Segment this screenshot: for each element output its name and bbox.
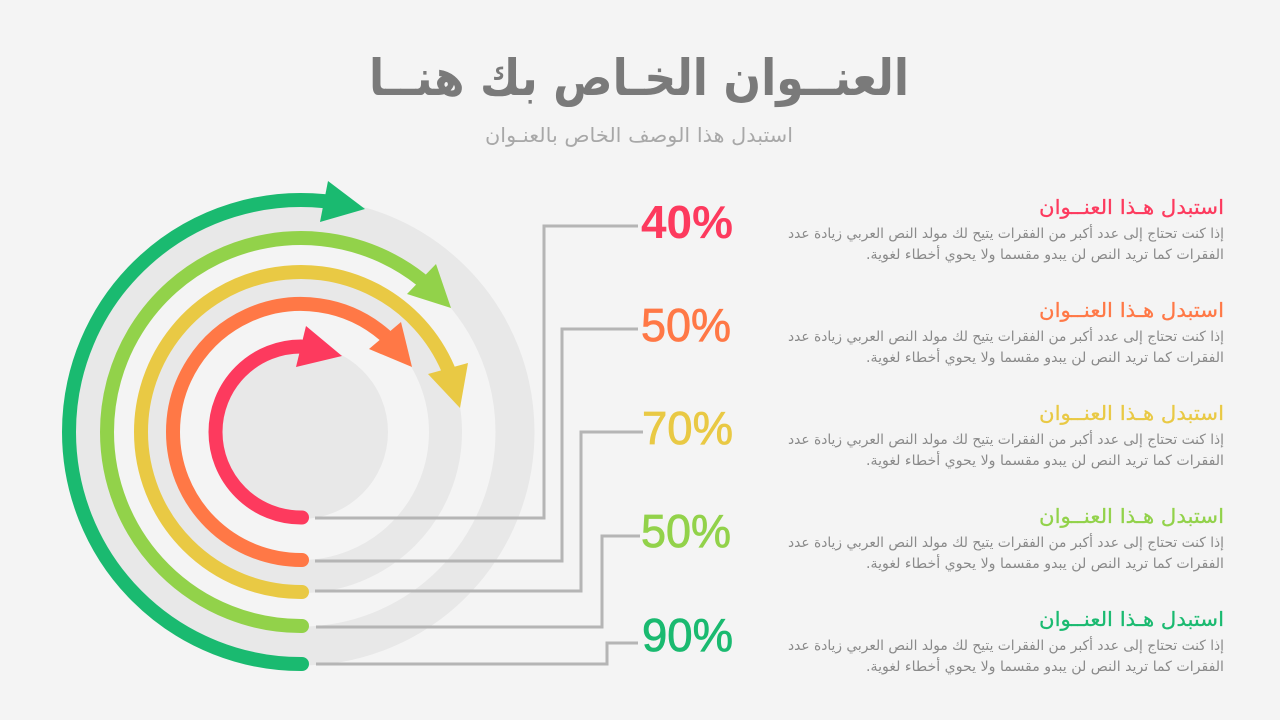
text block 1: استبدل هـذا العنــوان xyxy=(1039,195,1224,219)
text block 5 xyxy=(788,607,1224,675)
arrow: lime 50% xyxy=(107,238,451,626)
arrow: yellow 70% xyxy=(141,272,468,592)
percentage: 50%: 50% xyxy=(641,299,731,351)
text block 4: استبدل هـذا العنــوان xyxy=(1039,504,1224,528)
connector lines xyxy=(315,226,643,664)
background grey rings xyxy=(87,218,515,646)
text block 4: الفقرات كما تريد النص لن يبدو مقسما ولا يحوي أخطاء لغوية. xyxy=(866,554,1224,572)
text block 5: إذا كنت تحتاج إلى عدد أكبر من الفقرات يتيح لك مولد النص العربي زيادة عدد xyxy=(788,636,1224,654)
subtitle: استبدل هذا الوصف الخاص بالعنـوان xyxy=(485,123,793,147)
text block 1: إذا كنت تحتاج إلى عدد أكبر من الفقرات يتيح لك مولد النص العربي زيادة عدد xyxy=(788,224,1224,242)
text block 4: إذا كنت تحتاج إلى عدد أكبر من الفقرات يتيح لك مولد النص العربي زيادة عدد xyxy=(788,533,1224,551)
text block 4 xyxy=(788,504,1224,572)
arrow: pink 40% xyxy=(216,326,342,518)
text block 3 xyxy=(788,401,1224,469)
text block 2: إذا كنت تحتاج إلى عدد أكبر من الفقرات يتيح لك مولد النص العربي زيادة عدد xyxy=(788,327,1224,345)
percentage: 70%: 70% xyxy=(642,402,733,454)
percentage: 50%: 50% xyxy=(641,505,731,557)
arrow: green 90% xyxy=(69,181,365,664)
percentage: 40%: 40% xyxy=(641,196,733,248)
text block 3: إذا كنت تحتاج إلى عدد أكبر من الفقرات يتيح لك مولد النص العربي زيادة عدد xyxy=(788,430,1224,448)
text block 3: الفقرات كما تريد النص لن يبدو مقسما ولا يحوي أخطاء لغوية. xyxy=(866,451,1224,469)
text block 5: الفقرات كما تريد النص لن يبدو مقسما ولا يحوي أخطاء لغوية. xyxy=(866,657,1224,675)
percentage: 90%: 90% xyxy=(642,609,733,661)
text block 2: استبدل هـذا العنــوان xyxy=(1039,298,1224,322)
title: العنــوان الخـاص بك هنــا xyxy=(369,49,909,108)
arrow: orange 50% xyxy=(173,304,412,560)
text block 2 xyxy=(788,298,1224,366)
text block 5: استبدل هـذا العنــوان xyxy=(1039,607,1224,631)
text block 2: الفقرات كما تريد النص لن يبدو مقسما ولا يحوي أخطاء لغوية. xyxy=(866,348,1224,366)
text block 3: استبدل هـذا العنــوان xyxy=(1039,401,1224,425)
text block 1 xyxy=(788,195,1224,263)
text block 1: الفقرات كما تريد النص لن يبدو مقسما ولا يحوي أخطاء لغوية. xyxy=(866,245,1224,263)
